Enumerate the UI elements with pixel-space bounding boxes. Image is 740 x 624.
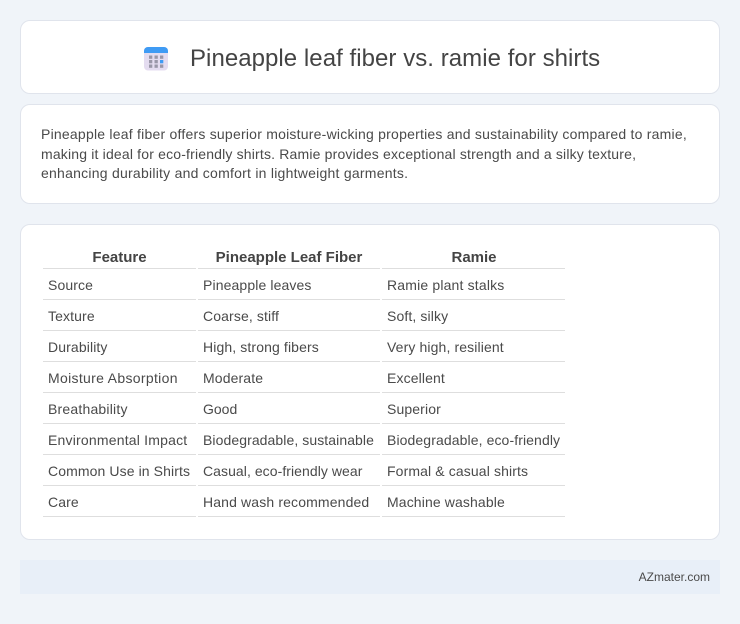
row: common use in shirts: Common Use in Shirts [48, 463, 190, 479]
summary text: Pineapple leaf fiber offers superior moisture-wicking properties and sustainability compared to ramie, [41, 126, 687, 142]
row: environmental impact: Biodegradable, eco-friendly [387, 432, 560, 448]
row: care [43, 494, 565, 517]
row: environmental impact [43, 432, 565, 455]
row: care: Care [48, 494, 79, 510]
row: environmental impact: Environmental Impact [48, 432, 187, 448]
row: source: Source [48, 277, 93, 293]
row: texture: Texture [48, 308, 95, 324]
comparison table [43, 249, 565, 517]
row: breathability [43, 401, 565, 424]
row: environmental impact: Biodegradable, sustainable [203, 432, 374, 448]
title: Pineapple leaf fiber vs. ramie for shirts [190, 45, 600, 72]
title card [20, 20, 720, 94]
footer bar [20, 560, 720, 594]
row: common use in shirts: Formal & casual shirts [387, 463, 528, 479]
table card [20, 224, 720, 540]
row: moisture absorption [43, 370, 565, 393]
summary card [20, 104, 720, 204]
row: texture: Coarse, stiff [203, 308, 279, 324]
row: moisture absorption: Moisture Absorption [48, 370, 178, 386]
column headings: Ramie [451, 249, 497, 266]
row: breathability: Superior [387, 401, 441, 417]
row: breathability: Good [203, 401, 237, 417]
row: source [43, 277, 565, 300]
summary text: enhancing durability and comfort in lightweight garments. [41, 165, 408, 181]
row: care: Hand wash recommended [203, 494, 369, 510]
row: source: Ramie plant stalks [387, 277, 504, 293]
row: texture [43, 308, 565, 331]
row: durability: Very high, resilient [387, 339, 504, 355]
row: source: Pineapple leaves [203, 277, 312, 293]
row: breathability: Breathability [48, 401, 128, 417]
column headings: Pineapple Leaf Fiber [216, 249, 362, 266]
row: moisture absorption: Moderate [203, 370, 263, 386]
icon: calendar [144, 47, 168, 70]
row: durability: High, strong fibers [203, 339, 319, 355]
row: durability: Durability [48, 339, 108, 355]
summary text [41, 126, 687, 181]
column headings [43, 249, 565, 269]
row: common use in shirts [43, 463, 565, 486]
row: care: Machine washable [387, 494, 505, 510]
row: durability [43, 339, 565, 362]
row: moisture absorption: Excellent [387, 370, 445, 386]
row: common use in shirts: Casual, eco-friendly wear [203, 463, 362, 479]
column headings: Feature [92, 249, 147, 266]
summary text: making it ideal for eco-friendly shirts. Ramie provides exceptional strength and a silky texture, [41, 146, 636, 162]
row: texture: Soft, silky [387, 308, 448, 324]
footer credit: AZmater.com [639, 570, 710, 584]
